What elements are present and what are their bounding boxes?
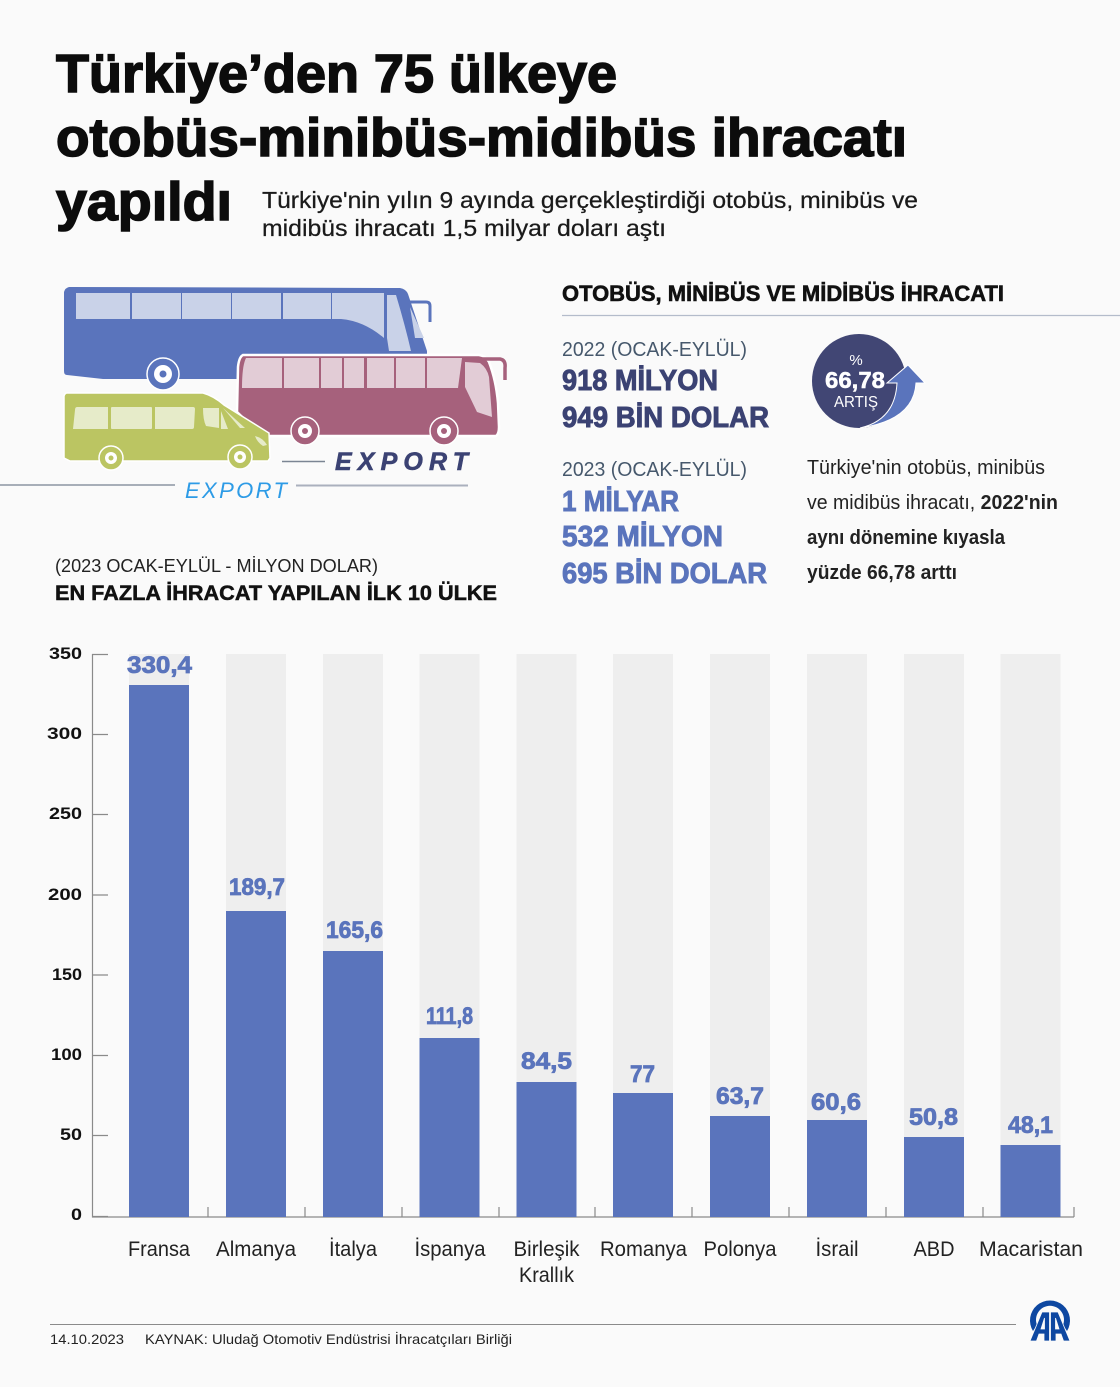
text block: increase description: aynı dönemine kıyasla	[807, 526, 1006, 549]
text block: 2022 value	[562, 338, 769, 434]
text block: 2023 value: 695 BİN DOLAR	[562, 558, 767, 590]
category labels: Polonya	[704, 1238, 777, 1261]
title: otobüs-minibüs-midibüs ihracatı	[56, 108, 907, 168]
title	[56, 44, 907, 232]
chart heading: (2023 OCAK-EYLÜL - MİLYON DOLAR)	[55, 556, 378, 576]
bars	[129, 685, 1060, 1217]
value labels: 189,7	[229, 874, 285, 901]
text block: 2022 value: 918 MİLYON	[562, 365, 718, 397]
text block: increase description: yüzde 66,78 arttı	[807, 561, 957, 584]
category labels: Krallık	[519, 1264, 574, 1287]
value labels: 84,5	[521, 1048, 572, 1075]
text block: 2023 value	[562, 458, 767, 590]
bar chart	[47, 644, 1083, 1287]
label: export light: EXPORT	[185, 478, 289, 503]
icon: maroon coach	[237, 355, 505, 445]
chart heading: EN FAZLA İHRACAT YAPILAN İLK 10 ÜLKE	[55, 580, 497, 605]
y axis labels: 0	[71, 1205, 82, 1224]
footer source: 14.10.2023	[50, 1331, 124, 1347]
y axis labels: 350	[49, 644, 82, 663]
axes	[92, 654, 1074, 1217]
subtitle: Türkiye'nin yılın 9 ayında gerçekleştirdiği otobüs, minibüs ve	[262, 187, 918, 213]
chart heading	[55, 556, 497, 605]
value labels: 330,4	[127, 652, 193, 679]
title: yapıldı	[56, 172, 232, 232]
text block: 2022 value: 2022 (OCAK-EYLÜL)	[562, 338, 747, 361]
text block: increase description	[807, 456, 1058, 584]
callout: increase badge: %	[849, 352, 863, 369]
value labels: 165,6	[326, 917, 383, 944]
y axis labels: 100	[51, 1045, 82, 1064]
category labels	[128, 1238, 1083, 1287]
value labels: 60,6	[811, 1089, 861, 1116]
footer source	[50, 1324, 1016, 1347]
category labels: İspanya	[414, 1238, 486, 1261]
category labels: Romanya	[600, 1238, 687, 1261]
category labels: ABD	[914, 1238, 954, 1261]
bar backgrounds	[129, 654, 1060, 1217]
subtitle: midibüs ihracatı 1,5 milyar doları aştı	[262, 215, 666, 241]
footer source: KAYNAK: Uludağ Otomotiv Endüstrisi İhracatçıları Birliği	[145, 1330, 512, 1347]
subtitle	[262, 187, 918, 241]
value labels	[127, 652, 1053, 1139]
value labels: 111,8	[426, 1003, 473, 1030]
category labels: Fransa	[128, 1238, 190, 1261]
value labels: 63,7	[716, 1083, 764, 1110]
y axis labels: 200	[48, 885, 82, 904]
icon: green minibus	[64, 393, 270, 470]
icon: AA logo	[1030, 1300, 1070, 1341]
value labels: 48,1	[1008, 1112, 1053, 1139]
category labels: Almanya	[216, 1238, 296, 1261]
y axis labels	[47, 644, 82, 1224]
category labels: İtalya	[329, 1238, 377, 1261]
y axis labels: 300	[47, 724, 82, 743]
title: Türkiye’den 75 ülkeye	[56, 44, 617, 104]
panel heading: export totals: OTOBÜS, MİNİBÜS VE MİDİBÜS İHRACATI	[562, 281, 1004, 306]
callout: increase badge: ARTIŞ	[834, 394, 878, 411]
y axis labels: 50	[60, 1125, 82, 1144]
y axis labels: 250	[49, 804, 82, 823]
value labels: 77	[630, 1061, 655, 1088]
callout: increase badge: 66,78	[825, 367, 885, 393]
label: export dark: EXPORT	[335, 448, 471, 476]
category labels: Macaristan	[979, 1238, 1083, 1261]
category labels: İsrail	[816, 1238, 858, 1261]
callout: increase badge	[812, 334, 925, 428]
text block: increase description: Türkiye'nin otobüs, minibüs	[807, 456, 1045, 479]
y axis labels: 150	[52, 965, 82, 984]
illustration: buses	[0, 287, 505, 503]
text block: 2022 value: 949 BİN DOLAR	[562, 402, 769, 434]
icon: blue coach	[64, 287, 430, 390]
text block: 2023 value: 2023 (OCAK-EYLÜL)	[562, 458, 747, 481]
category labels: Birleşik	[514, 1238, 580, 1261]
text block: increase description: ve midibüs ihracatı, 2022'nin	[807, 491, 1058, 514]
text block: 2023 value: 1 MİLYAR	[562, 486, 679, 518]
value labels: 50,8	[909, 1104, 958, 1131]
text block: 2023 value: 532 MİLYON	[562, 521, 723, 553]
